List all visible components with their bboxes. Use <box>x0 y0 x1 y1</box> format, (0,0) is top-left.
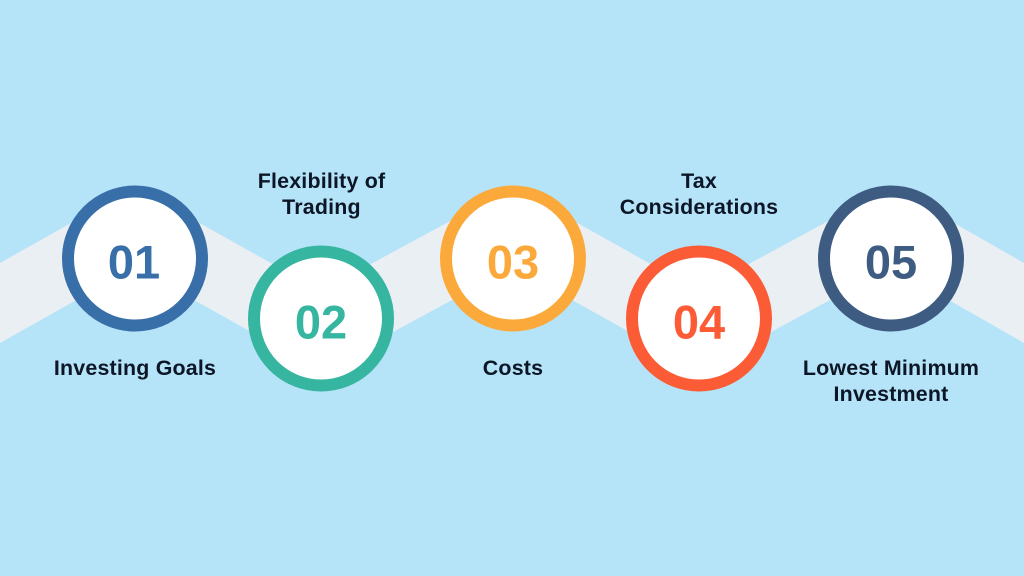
label: Lowest Minimum Investment: Investment <box>834 382 948 406</box>
label: Lowest Minimum Investment: Lowest Minimum <box>803 356 979 380</box>
number 03: 03 <box>487 236 539 288</box>
label: Flexibility of Trading: Flexibility of <box>258 169 386 193</box>
number 05: 05 <box>865 236 917 288</box>
circle 03 <box>446 192 580 326</box>
label: Investing Goals: Investing Goals <box>54 356 216 380</box>
label: Tax Considerations: Tax <box>681 169 717 193</box>
zigzag band <box>0 187 1024 371</box>
circle 04 <box>632 252 766 386</box>
label: Costs: Costs <box>483 356 543 380</box>
number 02: 02 <box>295 296 347 348</box>
circle 05 <box>824 192 958 326</box>
step 01: Investing Goals <box>54 192 216 380</box>
circle 02 <box>254 252 388 386</box>
step 04: Tax Considerations <box>620 169 778 386</box>
circle 01 <box>68 192 202 326</box>
step 05: Lowest Minimum Investment <box>803 192 979 406</box>
step 02: Flexibility of Trading <box>254 169 388 386</box>
number 04: 04 <box>673 296 725 348</box>
label: Tax Considerations: Considerations <box>620 195 778 219</box>
step 03: Costs <box>446 192 580 380</box>
label: Flexibility of Trading: Trading <box>282 195 361 219</box>
number 01: 01 <box>108 236 160 288</box>
